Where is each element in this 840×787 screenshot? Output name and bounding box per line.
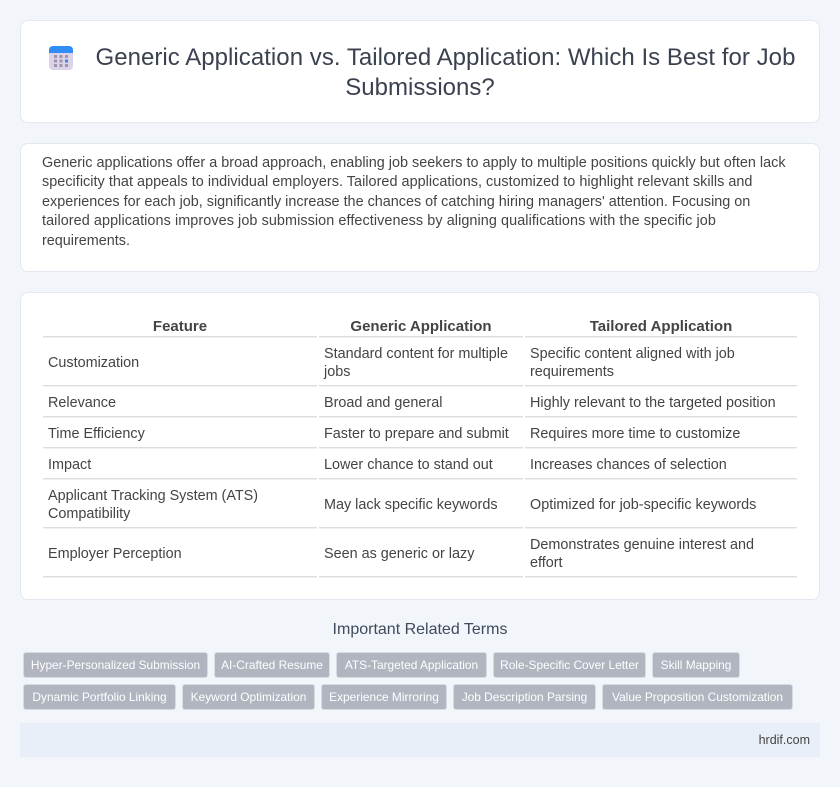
tag: Skill Mapping [661,658,731,672]
comparison table: Relevance [48,395,116,411]
comparison table: Broad and general [324,395,442,411]
table header: tailored application: Tailored Application [590,318,732,335]
panel: introduction [20,143,820,272]
title [96,44,795,101]
comparison table: Customization [48,355,139,371]
title: Generic Application vs. Tailored Application: Which Is Best for Job [96,44,795,71]
tag: AI-Crafted Resume [221,658,323,672]
comparison table: Compatibility [48,506,130,522]
tag [23,684,176,710]
related term tags [23,652,793,710]
comparison table: Seen as generic or lazy [324,546,474,562]
comparison table: Standard content for multiple [324,346,508,362]
footer: hrdif.com [759,733,810,747]
tag: Value Proposition Customization [612,690,783,704]
tag: Experience Mirroring [329,690,439,704]
heading: important related terms: Important Related Terms [333,621,507,638]
panel: comparison table [20,292,820,600]
comparison table: Specific content aligned with job [530,346,735,362]
footer [20,723,820,757]
tag [214,652,330,678]
comparison table: Time Efficiency [48,426,145,442]
intro text: specificity that appeals to individual employers. Tailored applications, customized to highlight relevant skills and [42,174,752,190]
intro text [42,155,786,249]
comparison table: May lack specific keywords [324,497,498,513]
comparison table: effort [530,555,563,571]
tag: Dynamic Portfolio Linking [32,690,167,704]
tag [493,652,646,678]
icon: calendar [49,46,73,70]
comparison table: Applicant Tracking System (ATS) [48,488,258,504]
comparison table [43,318,797,578]
tag [453,684,596,710]
tag [321,684,447,710]
comparison table: Lower chance to stand out [324,457,493,473]
tag [602,684,793,710]
intro text: requirements. [42,233,130,249]
tag [182,684,315,710]
table header: generic application: Generic Application [350,318,492,335]
comparison table: Optimized for job-specific keywords [530,497,756,513]
tag [652,652,740,678]
comparison table: jobs [324,364,350,380]
comparison table: Demonstrates genuine interest and [530,537,754,553]
tag: Hyper-Personalized Submission [31,658,200,672]
tag: Keyword Optimization [191,690,306,704]
intro text: tailored applications improves job submission effectiveness by aligning qualifications with the specific job [42,213,716,229]
comparison table: Highly relevant to the targeted position [530,395,776,411]
comparison table: Impact [48,457,91,473]
tag [23,652,208,678]
tag: ATS-Targeted Application [345,658,478,672]
panel: title header [20,20,820,123]
comparison table: Requires more time to customize [530,426,740,442]
comparison table: Employer Perception [48,546,182,562]
comparison table: requirements [530,364,614,380]
tag [336,652,487,678]
intro text: experiences for each job, significantly increase the chances of catching hiring managers' attention. Focusing on [42,194,750,210]
tag: Role-Specific Cover Letter [500,658,639,672]
tag: Job Description Parsing [462,690,587,704]
table header: feature: Feature [153,318,207,335]
title: Submissions? [345,74,495,101]
comparison table: Faster to prepare and submit [324,426,509,442]
intro text: Generic applications offer a broad approach, enabling job seekers to apply to multiple positions quickly but often lack [42,155,786,171]
comparison table: Increases chances of selection [530,457,727,473]
